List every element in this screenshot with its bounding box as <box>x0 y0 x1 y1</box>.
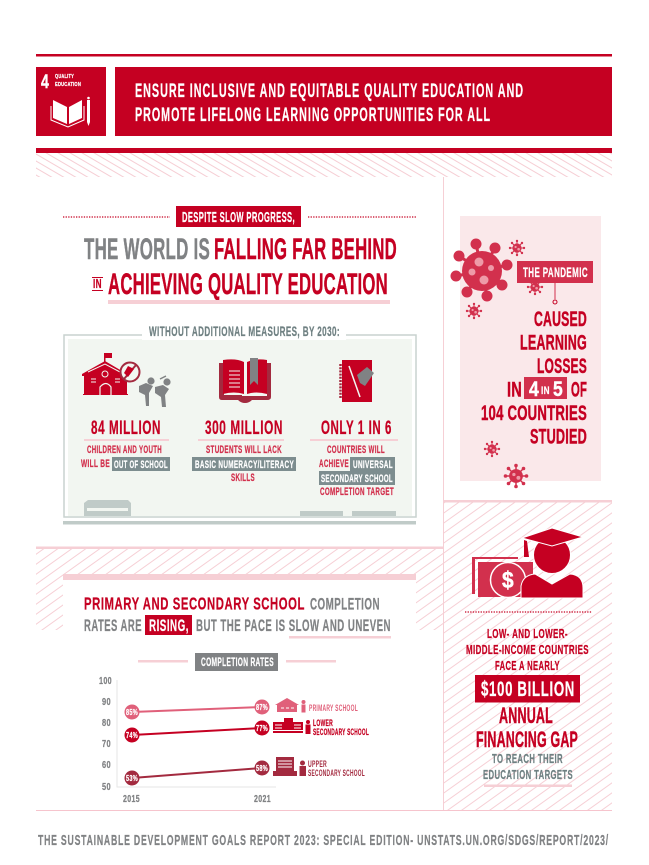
panel: pandemic learning losses: OF <box>571 378 587 402</box>
stat: 84 million: 84 MILLION <box>91 418 161 439</box>
chart label <box>138 653 336 671</box>
legend: upper secondary school: SECONDARY SCHOOL <box>308 768 365 779</box>
icon: school with no sign and children <box>82 353 171 407</box>
panel: pandemic learning losses: STUDIED <box>530 426 587 448</box>
panel: without additional measures: WITHOUT ADDITIONAL MEASURES, BY 2030: <box>149 323 340 339</box>
panel: without additional measures <box>63 322 416 524</box>
panel: pandemic learning losses: 104 COUNTRIES <box>481 402 587 425</box>
stat: only 1 in 6: ONLY 1 IN 6 <box>321 418 392 439</box>
stat: 84 million: OUT OF SCHOOL <box>114 459 168 471</box>
stat: only 1 in 6: UNIVERSAL <box>353 459 393 471</box>
line chart: 77% <box>256 724 268 733</box>
stat: only 1 in 6: COUNTRIES WILL <box>327 444 385 456</box>
right column vertical divider <box>443 177 444 810</box>
stat: 300 million <box>192 418 296 484</box>
stat: 84 million <box>81 418 170 471</box>
panel: financing gap: EDUCATION TARGETS <box>483 767 573 782</box>
legend: upper secondary school <box>273 757 365 779</box>
line chart: 90 <box>102 696 111 708</box>
panel: financing gap <box>443 500 612 810</box>
heading: despite slow progress: ACHIEVING QUALITY EDUCATION <box>108 268 388 301</box>
title banner <box>115 67 612 136</box>
icon: money and graduate <box>472 528 583 598</box>
heading: despite slow progress: FALLING FAR BEHIND <box>214 233 397 266</box>
icon: SDG 4 quality education tile <box>36 67 106 136</box>
stat: only 1 in 6: SECONDARY SCHOOL <box>321 473 393 485</box>
line chart: 85% <box>126 708 138 717</box>
heading: primary and secondary school completion: RISING, <box>149 616 189 635</box>
icon: SDG 4 quality education tile: 4 <box>41 72 49 93</box>
heading: despite slow progress: DESPITE SLOW PROGRESS, <box>182 210 295 226</box>
line chart: 74% <box>126 731 138 740</box>
panel: financing gap: LOW- AND LOWER- <box>487 626 568 641</box>
panel: pandemic learning losses: CAUSED <box>534 308 587 331</box>
icon: open book <box>219 358 271 403</box>
line chart: 100 <box>99 675 112 687</box>
heading: primary and secondary school completion: BUT THE PACE IS SLOW AND UNEVEN <box>196 616 391 635</box>
heading: despite slow progress <box>63 206 416 304</box>
legend: lower secondary school: SECONDARY SCHOOL <box>313 727 369 738</box>
heading: despite slow progress: IN <box>93 276 102 291</box>
panel: pandemic learning losses: LOSSES <box>537 355 587 378</box>
line chart: 80 <box>102 717 111 729</box>
panel: pandemic learning losses: 4 <box>529 378 539 401</box>
heading: primary and secondary school completion <box>84 594 391 638</box>
icon: money and graduate: $ <box>502 567 514 593</box>
legend: lower secondary school <box>273 718 369 738</box>
line chart: 87% <box>256 703 268 712</box>
icon: large virus <box>450 238 512 302</box>
line chart <box>99 675 276 805</box>
heading: primary and secondary school completion: PRIMARY AND SECONDARY SCHOOL <box>84 594 305 614</box>
heading: primary and secondary school completion: RATES ARE <box>84 616 142 635</box>
panel: pandemic learning losses: IN <box>541 385 550 397</box>
line chart: 50 <box>102 781 111 793</box>
panel: financing gap: ANNUAL <box>499 703 553 728</box>
stat: 300 million: SKILLS <box>231 472 255 484</box>
legend: primary school: PRIMARY SCHOOL <box>309 703 358 713</box>
header <box>36 54 612 177</box>
line chart: 2021 <box>254 793 271 805</box>
panel: pandemic learning losses: IN <box>507 378 522 402</box>
line chart: 58% <box>256 764 268 773</box>
panel: financing gap: TO REACH THEIR <box>492 751 563 766</box>
icon: notebook and pencil <box>340 360 374 402</box>
stat: only 1 in 6 <box>310 418 398 498</box>
icon: SDG 4 quality education tile: QUALITY <box>55 74 74 80</box>
chart label: COMPLETION RATES <box>201 655 274 669</box>
stat: only 1 in 6: COMPLETION TARGET <box>320 486 394 498</box>
panel: pandemic learning losses: LEARNING <box>520 332 587 354</box>
legend: lower secondary school: LOWER <box>313 718 333 729</box>
legend: primary school <box>275 698 358 713</box>
panel: pandemic learning losses: 5 <box>553 378 563 401</box>
line chart: 60 <box>102 759 111 771</box>
panel: completion rates section <box>36 546 443 805</box>
panel: financing gap: FACE A NEARLY <box>495 658 560 673</box>
line chart: 2015 <box>123 793 140 805</box>
stat: 84 million: WILL BE <box>81 458 110 470</box>
panel: financing gap: $100 BILLION <box>481 677 575 701</box>
panel: pandemic learning losses <box>450 216 601 488</box>
stat: 300 million: STUDENTS WILL LACK <box>206 444 282 456</box>
legend: upper secondary school: UPPER <box>308 759 327 770</box>
stat: 84 million: CHILDREN AND YOUTH <box>87 444 162 456</box>
icon: small viruses <box>466 240 543 488</box>
icon: SDG 4 quality education tile: EDUCATION <box>55 82 81 88</box>
panel: pandemic learning losses: THE PANDEMIC <box>523 264 588 280</box>
heading: despite slow progress: THE WORLD IS <box>84 233 210 266</box>
stat: only 1 in 6: ACHIEVE <box>319 458 349 470</box>
stat: 300 million: BASIC NUMERACY/LITERACY <box>195 459 294 471</box>
heading: primary and secondary school completion: COMPLETION <box>310 594 380 614</box>
line chart: 70 <box>102 738 111 750</box>
stat: 300 million: 300 MILLION <box>205 418 283 439</box>
line chart: 53% <box>126 774 138 783</box>
